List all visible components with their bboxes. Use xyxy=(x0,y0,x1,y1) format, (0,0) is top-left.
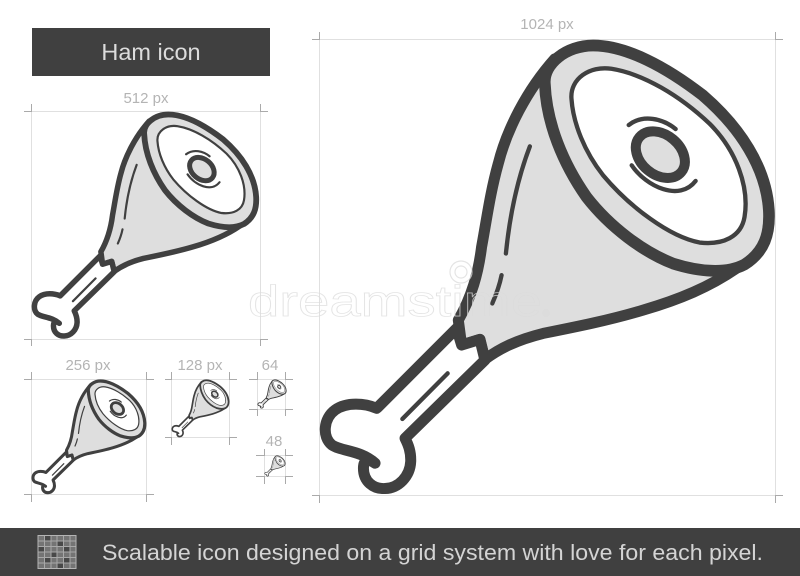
size label: 256 px: 256 px xyxy=(65,357,111,374)
footer bar xyxy=(0,528,800,576)
title banner: Ham icon xyxy=(101,39,201,65)
panel: 48 px icon xyxy=(256,433,293,484)
icon: ham 128 xyxy=(172,380,229,437)
icon: ham 256 xyxy=(33,381,145,493)
icon: ham 64 xyxy=(258,380,286,408)
size label: 128 px: 128 px xyxy=(177,357,223,374)
icon: ham 1024 xyxy=(325,45,769,489)
footer text: Scalable icon designed on a grid system with love for each pixel. xyxy=(102,540,763,565)
size label: 512 px: 512 px xyxy=(123,90,169,107)
watermark xyxy=(248,261,550,326)
icon: ham 512 xyxy=(34,114,256,336)
grid frame: 512 xyxy=(24,104,268,346)
panel: 64 px icon xyxy=(249,357,293,416)
size label: 1024 px: 1024 px xyxy=(520,16,574,33)
icon: pixel grid xyxy=(38,536,76,568)
watermark: dreamstime xyxy=(248,277,542,326)
panel: 512 px icon xyxy=(24,90,268,346)
icon: ham 48 xyxy=(265,456,285,476)
title banner xyxy=(32,28,270,76)
panel: 128 px icon xyxy=(165,357,237,445)
grid frame: 48 xyxy=(256,449,293,484)
grid frame: 64 xyxy=(249,372,293,416)
size label: 64: 64 xyxy=(262,357,278,374)
grid frame: 128 xyxy=(165,372,237,445)
grid frame: 1024 xyxy=(312,32,783,503)
size label: 48: 48 xyxy=(266,433,282,450)
grid frame: 256 xyxy=(24,372,154,502)
panel: 256 px icon xyxy=(24,357,154,502)
